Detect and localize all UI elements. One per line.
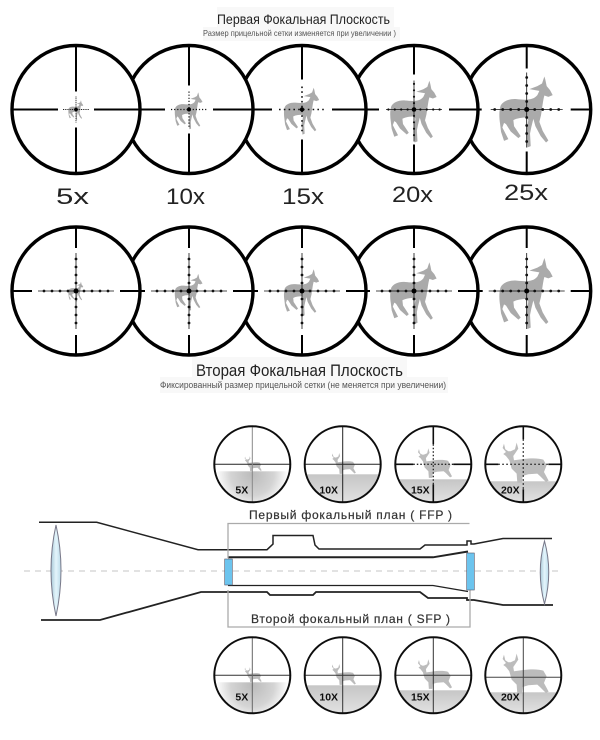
- scope FFP 15x: [238, 46, 366, 174]
- small scope FFP 20X: [485, 426, 561, 502]
- title: second focal plane: [160, 357, 448, 393]
- eyepiece lens: [540, 541, 549, 604]
- scope FFP 10x: [125, 46, 253, 174]
- scope FFP 25x: [463, 46, 591, 174]
- small scope SFP 15X: [395, 637, 471, 713]
- title: first focal plane: Размер прицельной сетки изменяется при увеличении ): [203, 28, 396, 38]
- first focal plane reticle: [225, 559, 232, 585]
- row: second focal plane scopes: [12, 227, 591, 355]
- magnification labels: 5x: [56, 184, 89, 209]
- magnification labels: 20x: [392, 182, 433, 207]
- title: second focal plane: Вторая Фокальная Плоскость: [196, 362, 403, 380]
- small scope SFP 10X: [305, 637, 381, 713]
- row: small FFP scopes: [214, 426, 561, 502]
- SFP label: Второй фокальный план ( SFP ): [251, 612, 450, 626]
- magnification labels: [56, 180, 548, 209]
- scope cross-section diagram: [24, 508, 562, 627]
- magnification labels: 25x: [504, 180, 548, 205]
- small scope SFP 20X: [485, 637, 561, 713]
- scope SFP 5x: [12, 227, 140, 355]
- second focal plane reticle: [467, 553, 474, 590]
- small scope FFP 15X: [395, 426, 471, 502]
- scope FFP 5x: [12, 46, 140, 174]
- small scope SFP 10X: 10X: [319, 691, 338, 703]
- small scope FFP 5X: [214, 426, 290, 502]
- inner tube upper: [228, 552, 468, 557]
- title: second focal plane: Фиксированный размер прицельной сетки (не меняется при увеличении): [160, 380, 446, 390]
- outer tube lower: [41, 592, 553, 620]
- scope SFP 15x: [238, 227, 366, 355]
- magnification labels: 10x: [166, 184, 205, 209]
- scope SFP 25x: [463, 227, 591, 355]
- small scope FFP 10X: [305, 426, 381, 502]
- inner tube lower: [228, 586, 468, 592]
- outer tube upper: [39, 522, 552, 550]
- title: first focal plane: [203, 7, 400, 41]
- small scope FFP 5X: 5X: [235, 484, 248, 496]
- small scope FFP 10X: 10X: [319, 484, 338, 496]
- small scope SFP 15X: 15X: [411, 691, 430, 703]
- scope SFP 20x: [350, 227, 478, 355]
- small scope SFP 5X: [214, 637, 290, 713]
- magnification labels: 15x: [282, 184, 324, 209]
- small scope FFP 20X: 20X: [501, 484, 520, 496]
- FFP label: Первый фокальный план ( FFP ): [249, 508, 452, 522]
- small scope SFP 5X: 5X: [235, 691, 248, 703]
- focal plane frames: [228, 524, 470, 627]
- small scope FFP 15X: 15X: [411, 484, 430, 496]
- title: first focal plane: Первая Фокальная Плоскость: [217, 11, 390, 27]
- small scope SFP 20X: 20X: [501, 691, 520, 703]
- objective lens: [51, 525, 61, 616]
- row: small SFP scopes: [214, 637, 561, 713]
- center axis: [24, 570, 562, 572]
- scope SFP 10x: [125, 227, 253, 355]
- scope FFP 20x: [350, 46, 478, 174]
- row: first focal plane scopes: [12, 46, 591, 174]
